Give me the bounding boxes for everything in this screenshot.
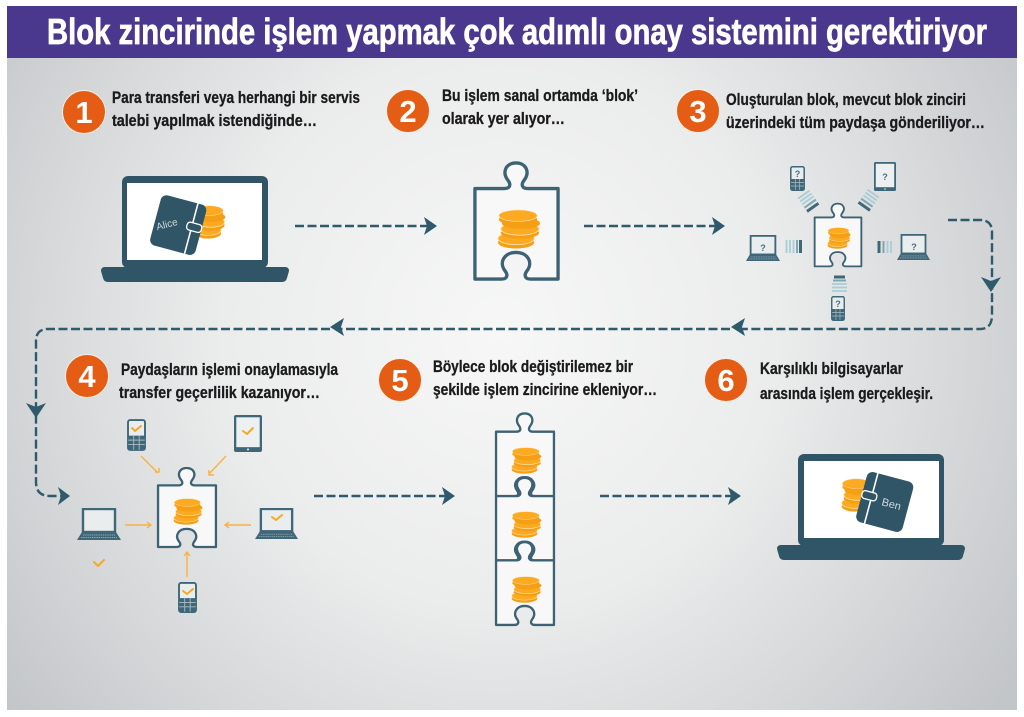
icon: central puzzle block	[158, 468, 216, 547]
diagram: stakeholders approve block	[77, 415, 298, 612]
step 6 heading: 6	[717, 363, 735, 398]
icon: phone bottom	[832, 297, 844, 320]
step 1 heading: talebi yapılmak istendiğinde…	[112, 111, 317, 130]
arrow: connector from step 3 to step 4 row	[26, 220, 1001, 505]
step 2 heading: Bu işlem sanal ortamda ‘blok’	[442, 86, 638, 105]
step 5 heading	[378, 357, 657, 402]
icon: phone bottom	[179, 583, 196, 612]
step 4 heading: 4	[78, 359, 96, 394]
icon: tablet top right	[234, 415, 262, 452]
icon: Ben laptop with wallet	[777, 454, 965, 560]
icon: laptop right	[255, 509, 298, 539]
icon: tablet top right	[874, 162, 896, 191]
icon: chain of three puzzle blocks	[496, 413, 554, 625]
icon: phone bottom: ?	[835, 299, 841, 309]
step 5 heading: şekilde işlem zincirine ekleniyor…	[433, 380, 657, 399]
step 2 heading: 2	[399, 94, 417, 129]
icon: laptop right	[897, 235, 930, 260]
step 2 heading: olarak yer alıyor…	[442, 109, 565, 128]
diagram: block broadcast to stakeholders	[746, 162, 930, 320]
step 2 heading	[386, 86, 638, 132]
icon: laptop left	[77, 509, 121, 540]
step 6 heading: Karşılıklı bilgisayarlar	[760, 359, 903, 378]
step 4 heading: transfer geçerlilik kazanıyor…	[119, 383, 320, 402]
icon: central puzzle block	[815, 204, 861, 266]
step 4 heading: Paydaşların işlemi onaylamasıyla	[121, 360, 338, 379]
step 3 heading: Oluşturulan blok, mevcut blok zinciri	[726, 90, 966, 109]
icon: laptop right: ?	[911, 242, 917, 252]
icon: puzzle block with coins	[475, 163, 558, 279]
arrow: 2 to 3	[584, 217, 725, 235]
icon: signal waves	[786, 190, 891, 291]
arrow: 1 to 2	[295, 217, 437, 235]
icon: phone top left: ?	[795, 169, 800, 179]
icon: laptop left: ?	[760, 243, 766, 253]
step 1 heading: 1	[75, 95, 93, 130]
arrow: 5 to 6	[600, 487, 741, 505]
icon: Alice laptop with wallet	[101, 176, 289, 282]
arrow: 4 to 5	[314, 487, 455, 505]
icon: phone top left	[128, 420, 145, 450]
icon: Alice laptop with wallet: Alice	[155, 217, 179, 233]
step 1 heading: Para transferi veya herhangi bir servis	[112, 88, 360, 107]
step 4 heading	[66, 354, 338, 402]
step 1 heading	[62, 88, 360, 134]
step 5 heading: 5	[391, 363, 409, 398]
icon: laptop left	[746, 236, 780, 261]
icon: loose check mark	[94, 560, 104, 566]
step 3 heading	[676, 90, 985, 132]
step 6 heading: arasında işlem gerçekleşir.	[760, 384, 933, 403]
icon: phone top left	[791, 167, 804, 190]
arrows: approvals	[125, 456, 251, 577]
icon: tablet top right: ?	[882, 172, 888, 182]
step 5 heading: Böylece blok değiştirilemez bir	[433, 357, 633, 376]
icon: Ben laptop with wallet: Ben	[880, 496, 902, 513]
step 6 heading	[704, 358, 933, 403]
step 3 heading: 3	[689, 94, 707, 129]
